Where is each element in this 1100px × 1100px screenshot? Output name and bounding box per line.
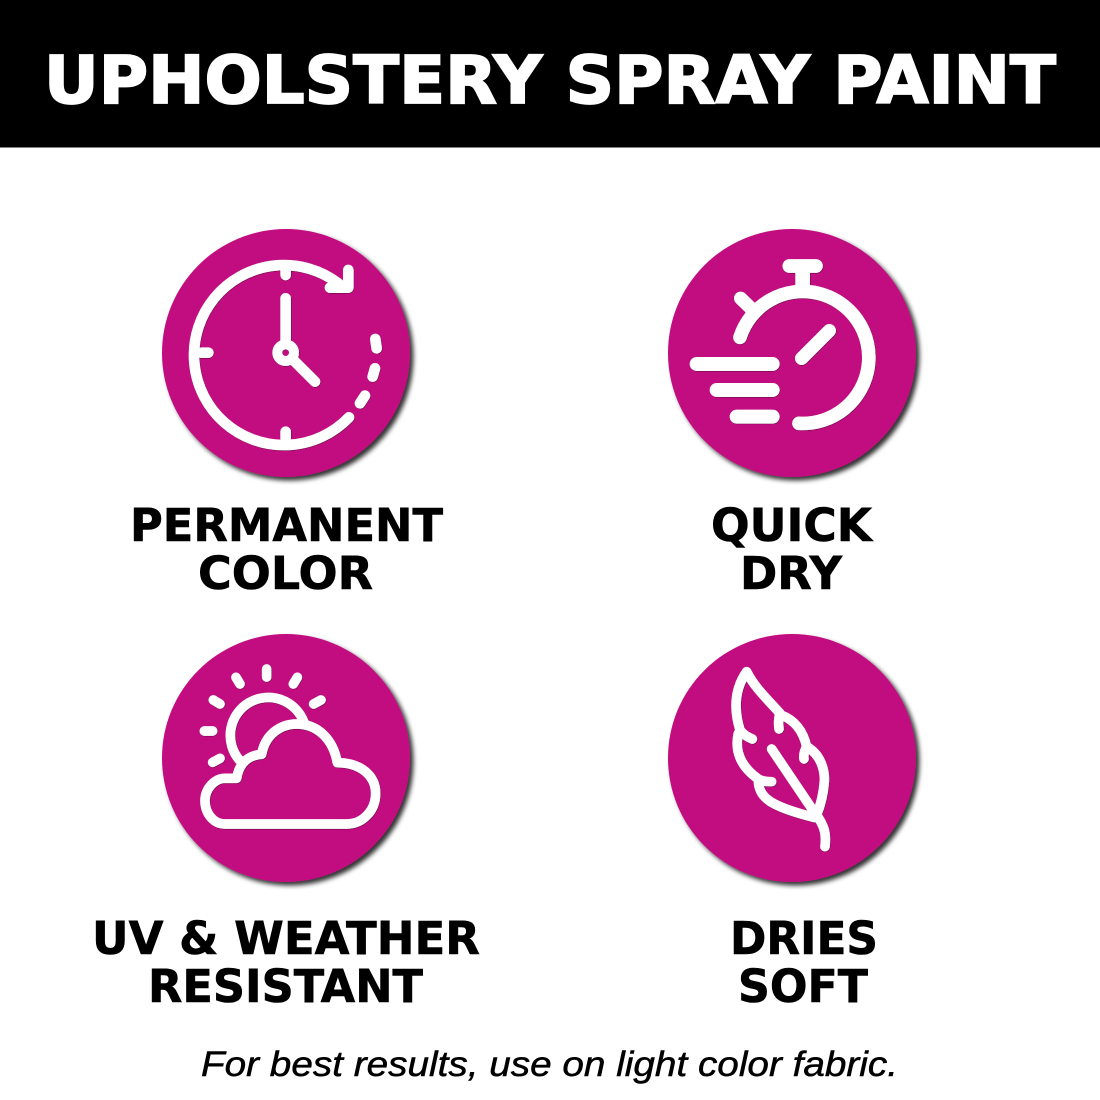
label: permanent color: COLOR [198, 547, 373, 600]
label: dries soft: DRIES [730, 912, 878, 965]
label: uv and weather resistant: UV & WEATHER [92, 912, 480, 965]
label: uv and weather resistant [92, 912, 480, 1013]
label: permanent color [130, 499, 443, 600]
label: quick dry [711, 499, 874, 600]
icon: stopwatch with speed lines [697, 266, 869, 423]
panel: permanent color [130, 229, 443, 600]
label: uv and weather resistant: RESISTANT [148, 960, 423, 1013]
label: quick dry: QUICK [711, 499, 874, 552]
panel: uv and weather resistant [92, 634, 480, 1013]
panel: quick dry [668, 229, 916, 600]
title: UPHOLSTERY SPRAY PAINT [44, 42, 1056, 119]
label: quick dry: DRY [740, 547, 843, 600]
badge circle: uv and weather [162, 634, 410, 882]
footnote: For best results, use on light color fabric. [201, 1045, 898, 1084]
panel: dries soft [668, 634, 916, 1013]
title banner [0, 0, 1100, 148]
icon: feather [736, 672, 825, 847]
badge circle: quick dry [668, 229, 916, 477]
label: permanent color: PERMANENT [130, 499, 443, 552]
label: dries soft: SOFT [738, 960, 868, 1013]
icon: sun and cloud [204, 669, 376, 824]
badge circle: dries soft [668, 634, 916, 882]
badge circle: permanent color [162, 229, 410, 477]
icon: clock with circular arrow [194, 265, 377, 445]
label: dries soft [730, 912, 878, 1013]
